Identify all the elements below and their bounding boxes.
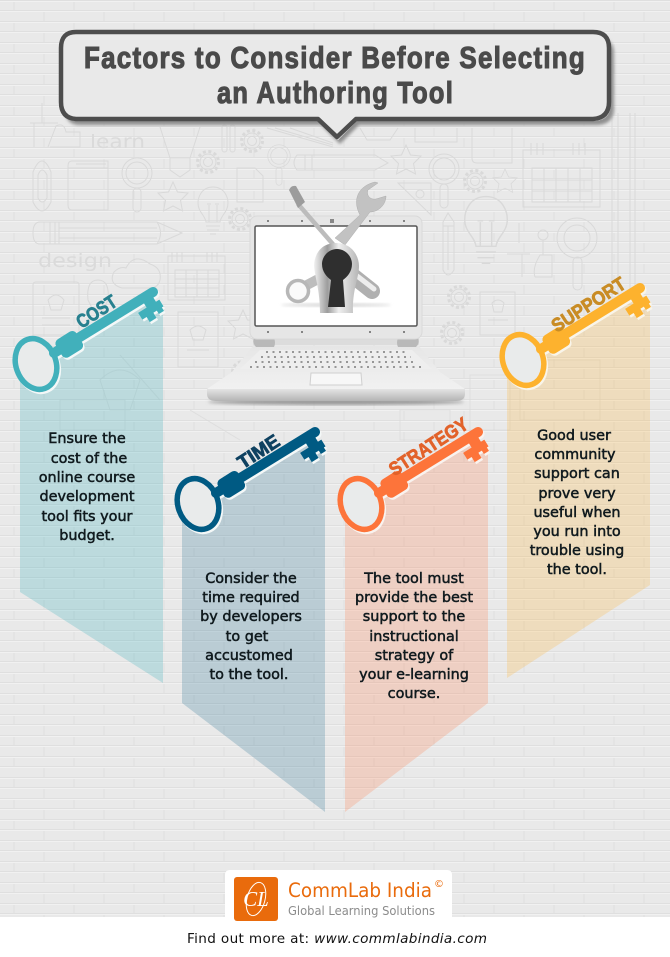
panel: cost [20,302,163,683]
logo name: CommLab India [288,879,432,902]
key: support: SUPPORT [548,274,630,337]
cost text: budget. [59,528,115,544]
strategy panel shape [345,442,488,812]
support text: Good user [537,428,611,444]
time text: Consider the [205,571,297,587]
key: strategy [333,414,493,537]
icon: screwdriver [289,186,374,291]
logo mark [234,877,278,921]
title speech bubble [61,32,614,144]
time text [200,571,302,683]
faint word: design: design [38,250,112,272]
cost text [39,431,135,544]
icon: keyhole [314,243,359,313]
key: strategy: STRATEGY [386,414,473,481]
key: cost [8,291,168,397]
key: time: TIME [234,431,284,474]
cost panel shape [20,302,163,683]
time panel shape [182,442,325,812]
time text: time required [202,590,300,606]
strategy text: strategy of [375,648,454,664]
strategy text: course. [388,686,440,702]
icon: wrench [288,182,386,302]
cost text: development [40,489,135,505]
strategy text: provide the best [355,590,473,606]
title: an Authoring Tool [217,75,454,110]
title [84,40,586,110]
laptop lid and screen [250,216,422,339]
footer link text: Find out more at: www.commlabindia.com [187,931,487,947]
panel: time [182,442,325,812]
support text: support can [534,466,620,482]
strategy text: The tool must [363,571,464,587]
time text: to the tool. [209,667,289,683]
support text: you run into [533,524,621,540]
key: support [495,274,655,393]
support text: the tool. [547,562,607,578]
support text [530,428,624,578]
cost text: Ensure the [48,431,126,447]
key: cost: COST [73,291,121,333]
laptop base [207,338,465,405]
logo mark: CL [243,887,269,911]
time text: to get [226,629,269,645]
support text: trouble using [530,543,624,559]
time text: by developers [200,609,302,625]
strategy text [355,571,473,702]
panel: support [507,298,650,678]
logo: CommLab India [225,870,452,921]
strategy text: support to the [363,609,465,625]
faint word: learn: learn [90,131,145,153]
time text: accustomed [205,648,293,664]
support text: prove very [538,486,616,502]
footer band [0,917,670,957]
support panel shape [507,298,650,678]
illustration: laptop with tools and keyhole [207,182,465,405]
cost text: cost of the [51,451,127,467]
panel: strategy [345,442,488,812]
support text: community [534,447,616,463]
key: time [170,431,330,537]
strategy text: your e-learning [359,667,469,683]
logo tagline: Global Learning Solutions [288,903,435,918]
faint background doodle icons [30,103,635,440]
copyright mark: © [434,879,444,890]
title: Factors to Consider Before Selecting [84,40,586,75]
strategy text: instructional [369,629,459,645]
support text: useful when [533,505,621,521]
cost text: tool fits your [42,509,133,525]
cost text: online course [39,470,135,486]
